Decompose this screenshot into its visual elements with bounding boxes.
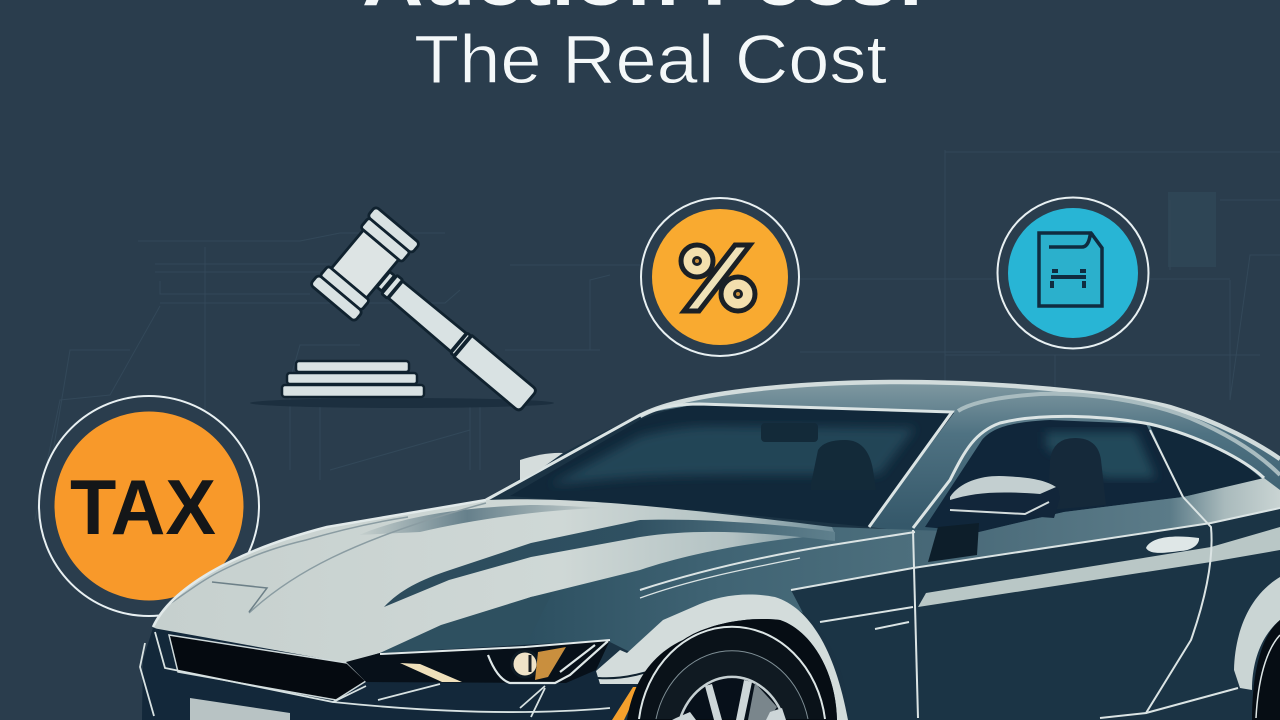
front wheel arch band <box>596 594 848 720</box>
windshield glass highlight <box>550 426 915 485</box>
door outline <box>640 497 1280 718</box>
headlight <box>346 640 610 683</box>
icon: document badge <box>998 198 1148 348</box>
rear view mirror <box>761 423 818 442</box>
hood <box>153 499 835 663</box>
lens centre <box>528 655 532 672</box>
side window <box>925 420 1183 532</box>
rear wheel <box>1252 620 1280 720</box>
front fender dark panel <box>791 568 917 720</box>
icon: percent badge <box>641 198 799 356</box>
windshield frame <box>486 404 952 527</box>
hood edge highlight <box>153 500 486 627</box>
door light strip <box>918 527 1280 607</box>
side mirror stub on far side <box>520 453 563 480</box>
illustration: sports car <box>140 380 1280 720</box>
rear wheel arch band <box>1234 577 1280 690</box>
document badge ring <box>998 198 1148 348</box>
grille <box>169 635 366 700</box>
title <box>362 0 925 98</box>
rear side window <box>1150 426 1262 497</box>
daytime running light <box>400 663 462 682</box>
rim spokes <box>672 680 786 720</box>
hood top streak <box>359 505 600 535</box>
side window highlight <box>1046 432 1156 478</box>
gavel hammer <box>310 206 561 440</box>
tyre inner line <box>656 651 808 719</box>
roof panel <box>640 380 1280 532</box>
blueprint background lines <box>35 150 1280 520</box>
title line: subheading: The Real Cost <box>414 21 887 98</box>
rim <box>680 677 784 719</box>
side window frame <box>913 416 1264 528</box>
windshield interior <box>761 423 876 490</box>
rear tyre line <box>1256 635 1280 718</box>
mirror top cap <box>950 476 1056 500</box>
side mirror <box>928 476 1060 562</box>
rim grey segment <box>748 683 777 720</box>
orange marker light <box>612 687 640 720</box>
roof highlight <box>640 382 1280 459</box>
gavel base shadow <box>250 398 554 408</box>
roof inner contour <box>958 394 1280 475</box>
tax badge ring <box>39 396 259 616</box>
fascia white lines <box>140 632 610 717</box>
headlight amber <box>535 647 566 680</box>
licence plate <box>190 698 290 720</box>
gavel base <box>282 361 424 397</box>
percent glyph <box>681 245 755 311</box>
front wheel <box>639 627 825 720</box>
lower door side panel <box>913 508 1280 720</box>
side window seat <box>1048 438 1106 510</box>
arch dark crease <box>598 663 672 678</box>
headlight lens <box>512 651 538 677</box>
hood contour lines <box>171 503 486 613</box>
tax badge label: TAX <box>70 463 216 551</box>
tax badge disc <box>54 412 244 600</box>
mirror body <box>950 488 1060 518</box>
mirror lower highlight <box>950 502 1049 514</box>
icon: gavel <box>250 206 561 440</box>
hood dark stripe <box>384 520 835 607</box>
icon: tax badge <box>39 396 259 616</box>
front wheel well <box>627 619 837 720</box>
headlight brow <box>380 640 610 654</box>
front seat <box>811 440 876 490</box>
windshield <box>510 405 950 527</box>
percent badge ring <box>641 198 799 356</box>
dark wedge over headlight <box>380 593 552 653</box>
document badge disc <box>1008 208 1138 338</box>
teal fender <box>522 527 915 657</box>
tyre outline <box>639 627 825 719</box>
door handle <box>1146 536 1199 553</box>
percent badge disc <box>652 209 788 345</box>
car body silhouette <box>142 381 1280 720</box>
blueprint pale block <box>1168 192 1216 267</box>
headlight outline <box>488 641 608 683</box>
mirror stem <box>928 523 979 562</box>
front fascia <box>142 628 640 720</box>
door pillar line <box>1150 430 1183 497</box>
document glyph with car <box>1039 233 1102 306</box>
door belt panel <box>913 478 1280 568</box>
